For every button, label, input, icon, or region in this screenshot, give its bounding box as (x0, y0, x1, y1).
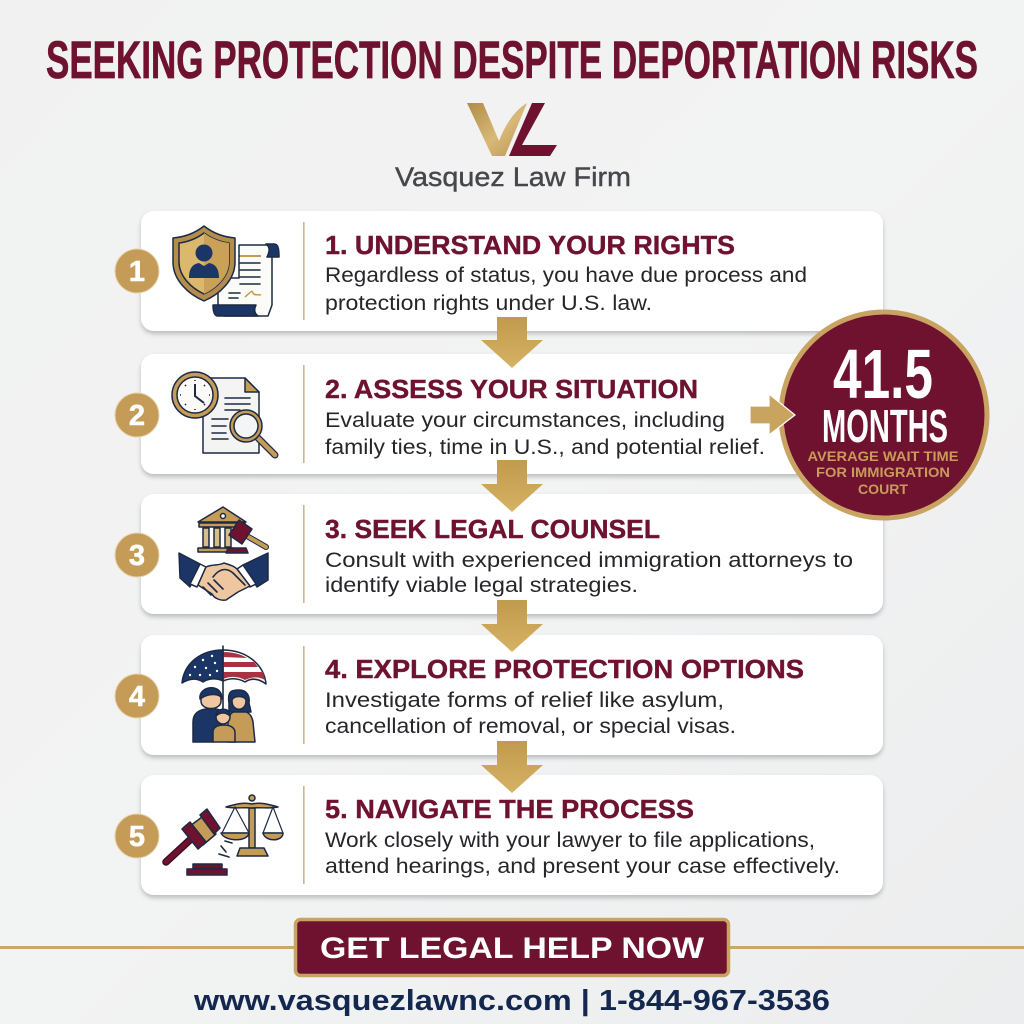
button: get legal help now: GET LEGAL HELP NOW (320, 932, 705, 965)
step 4 description: cancellation of removal, or special visas. (325, 715, 736, 738)
panel: step 2 assess your situation (115, 354, 883, 474)
step 3 description: Consult with experienced immigration attorneys to (325, 549, 853, 572)
number badge 2: 2 (129, 400, 145, 432)
arrow: step 2 to step 3 (481, 460, 543, 512)
step 4 heading: 4. EXPLORE PROTECTION OPTIONS (325, 654, 804, 684)
divider line right (728, 946, 1024, 949)
step 3 heading: 3. SEEK LEGAL COUNSEL (325, 514, 660, 544)
panel: step 1 understand your rights (115, 211, 883, 331)
panel: step 5 navigate the process (115, 775, 883, 895)
step 1 description: Regardless of status, you have due process and (325, 264, 807, 287)
number badge 4: 4 (129, 681, 145, 713)
step 4 description (325, 689, 736, 738)
step 4 description: Investigate forms of relief like asylum, (325, 689, 724, 712)
step 2 description: family ties, time in U.S., and potential relief. (325, 436, 765, 459)
callout: 41.5 months average wait (750, 312, 987, 518)
button: get legal help now (296, 920, 728, 976)
number badge 4 (115, 674, 159, 718)
icon: courthouse, gavel and handshake (179, 507, 268, 600)
panel: step 3 seek legal counsel (115, 494, 883, 614)
step 3 description (325, 549, 853, 597)
callout number: 41.5 (833, 335, 933, 413)
logo: Vasquez Law Firm (395, 103, 631, 192)
step 1 heading: 1. UNDERSTAND YOUR RIGHTS (325, 230, 735, 260)
logo mark: VL monogram (467, 103, 557, 156)
icon: shield and legal scroll (173, 226, 279, 316)
callout caption: AVERAGE WAIT TIME (808, 448, 958, 464)
arrow: step 1 to step 2 (481, 317, 543, 368)
panel: step 4 explore protection options (115, 635, 883, 755)
divider line left (0, 946, 296, 949)
icon: flag umbrella over family (182, 646, 266, 742)
icon: gavel and scales of justice (166, 795, 283, 875)
step 1 description (325, 264, 807, 315)
number badge 5 (115, 814, 159, 858)
number badge 2 (115, 393, 159, 437)
step 2 description: Evaluate your circumstances, including (325, 409, 725, 432)
number badge 1: 1 (129, 256, 145, 288)
callout unit: MONTHS (822, 400, 948, 452)
step 5 description (325, 829, 840, 878)
step 2 heading: 2. ASSESS YOUR SITUATION (325, 374, 698, 404)
number badge 1 (115, 249, 159, 293)
icon: clock, document and magnifier (172, 372, 275, 455)
contact line: www.vasquezlawnc.com | 1-844-967-3536 (193, 985, 830, 1017)
step 3 description: identify viable legal strategies. (325, 574, 638, 597)
step 1 description: protection rights under U.S. law. (325, 292, 652, 315)
arrow: step 4 to step 5 (481, 741, 543, 793)
arrow: situation to callout (750, 394, 795, 435)
step 5 description: Work closely with your lawyer to file applications, (325, 829, 815, 852)
step 5 heading: 5. NAVIGATE THE PROCESS (325, 794, 694, 824)
number badge 3 (115, 533, 159, 577)
callout caption: COURT (858, 481, 908, 497)
logo wordmark: Vasquez Law Firm (395, 162, 631, 192)
step 5 description: attend hearings, and present your case effectively. (325, 855, 840, 878)
arrow: step 3 to step 4 (481, 600, 543, 652)
number badge 3: 3 (129, 540, 145, 572)
number badge 5: 5 (129, 821, 145, 853)
callout caption (808, 448, 958, 497)
step 2 description (325, 409, 765, 459)
callout caption: FOR IMMIGRATION (816, 464, 950, 480)
